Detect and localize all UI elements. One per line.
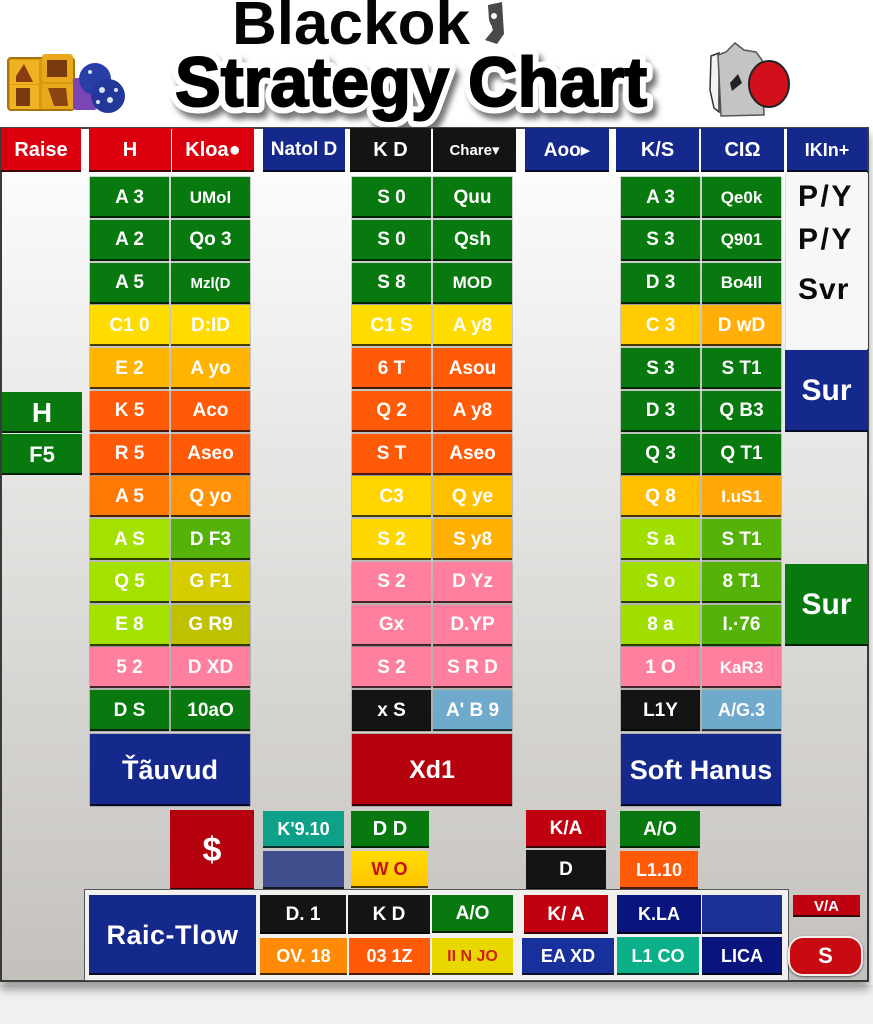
cell: D. 1 xyxy=(286,904,320,924)
tag: V/A xyxy=(793,895,860,917)
bottom panel xyxy=(84,889,789,981)
header: H: H xyxy=(123,138,137,160)
cell xyxy=(171,434,250,474)
cell xyxy=(702,434,781,474)
cell xyxy=(90,177,169,218)
cell: A 3 xyxy=(646,186,675,208)
cell xyxy=(90,305,169,346)
cell xyxy=(617,895,701,934)
cell: K'9.10: K'9.10 xyxy=(277,819,330,839)
cell xyxy=(621,434,700,474)
cell: A/G.3 xyxy=(718,700,765,720)
cell: K/A xyxy=(526,810,606,848)
cell xyxy=(90,690,169,731)
cell: Qo 3 xyxy=(189,229,232,250)
cell xyxy=(702,562,781,603)
text: P/Y: P/Y xyxy=(798,180,854,213)
cell xyxy=(702,895,782,934)
header: Moae: Kloa● xyxy=(185,138,241,160)
cell: C3 xyxy=(379,486,404,507)
cell: A/O: A/O xyxy=(643,818,677,840)
block: title xyxy=(352,734,512,806)
cell xyxy=(702,305,781,346)
header: K D xyxy=(350,128,431,172)
cell: Bo4ll xyxy=(721,273,762,292)
left labels xyxy=(2,392,82,475)
cell xyxy=(171,305,250,346)
cell xyxy=(702,647,781,688)
column: soft hands xyxy=(620,176,782,806)
cell: D S xyxy=(114,700,145,720)
cell xyxy=(433,305,512,346)
cell: x S xyxy=(377,700,406,720)
cell: A S xyxy=(114,528,145,550)
cell: A/O xyxy=(456,903,489,924)
cell xyxy=(352,305,431,346)
note panel xyxy=(785,173,868,349)
cell: L1 CO xyxy=(631,946,684,966)
cell: K/ A xyxy=(547,904,585,924)
cell xyxy=(621,348,700,389)
cell xyxy=(90,434,169,474)
cell: K'9.10 xyxy=(263,811,344,848)
cell: D XD xyxy=(188,657,233,678)
header row xyxy=(1,128,867,172)
right column xyxy=(785,173,868,646)
cell: D D: D D xyxy=(373,818,407,840)
header: CIΩ: CIΩ xyxy=(724,138,761,160)
cell: OV. 18 xyxy=(276,946,331,966)
block: $: $ xyxy=(203,830,221,868)
cell xyxy=(433,690,512,731)
cell xyxy=(352,647,431,688)
cell xyxy=(90,519,169,560)
cell xyxy=(621,647,700,688)
cell xyxy=(702,177,781,218)
cell xyxy=(90,220,169,261)
cell: S 0 xyxy=(377,186,406,208)
cell: D Yz xyxy=(452,571,493,592)
background below panel xyxy=(0,985,873,1024)
cell xyxy=(702,476,781,517)
cell: KaR3 xyxy=(720,658,763,677)
cell xyxy=(352,391,431,432)
block: Sur blue xyxy=(785,350,868,432)
cell: D D xyxy=(351,811,429,848)
cell xyxy=(621,220,700,261)
header: K D: K D xyxy=(373,138,408,160)
cell xyxy=(432,895,513,933)
cell xyxy=(621,262,700,304)
cell: C 3 xyxy=(646,315,675,336)
block: Sur green: Sur xyxy=(801,588,852,621)
cell: A y8 xyxy=(453,400,492,421)
cell xyxy=(352,519,431,560)
cell: I.·76 xyxy=(722,614,761,635)
cell xyxy=(260,938,347,975)
cell: S 3 xyxy=(646,229,675,250)
cell xyxy=(524,895,608,934)
cell: D:ID xyxy=(191,315,230,336)
cell xyxy=(432,938,513,975)
cell xyxy=(433,434,512,474)
label: F5: F5 xyxy=(29,442,55,466)
cell: S T xyxy=(377,443,406,464)
cell xyxy=(702,348,781,389)
cell: L1Y xyxy=(643,700,678,720)
cell: Q 8 xyxy=(645,486,676,507)
cell: Q T1 xyxy=(720,443,763,464)
header: Min+: IKIn+ xyxy=(805,140,849,160)
cell xyxy=(352,262,431,304)
cell xyxy=(90,348,169,389)
cell: 03 1Z xyxy=(366,946,413,966)
icon: card with red circle xyxy=(709,42,790,117)
header: Natol D xyxy=(263,128,345,172)
header: Chare xyxy=(433,128,516,172)
title line 2 shadow: Strategy Chart xyxy=(179,49,651,127)
cell xyxy=(90,262,169,304)
cell xyxy=(171,348,250,389)
cell: UMol xyxy=(190,188,231,206)
cell: L1.10: L1.10 xyxy=(636,860,682,880)
cell: Aco xyxy=(193,400,228,421)
cell: A y8 xyxy=(453,315,492,336)
cell: A 3 xyxy=(115,186,144,208)
cell xyxy=(171,476,250,517)
header: Min+ xyxy=(787,128,867,172)
cell: G F1 xyxy=(189,571,232,592)
cell xyxy=(621,476,700,517)
cell: E 8 xyxy=(115,614,144,635)
cell: D xyxy=(526,850,606,890)
block: Soft Hands xyxy=(621,734,781,806)
cell: 5 2 xyxy=(116,657,143,678)
header: Chare: Chare▾ xyxy=(449,142,500,159)
cell xyxy=(90,562,169,603)
cell: Q yo xyxy=(189,486,232,507)
button: S: S xyxy=(818,943,833,968)
cell xyxy=(352,348,431,389)
cell xyxy=(433,348,512,389)
cell xyxy=(433,647,512,688)
cell xyxy=(522,938,614,975)
cell: A 5 xyxy=(115,486,144,507)
cell xyxy=(702,937,782,975)
cell xyxy=(171,690,250,731)
block: title xyxy=(90,734,250,806)
cell: Q 3 xyxy=(645,443,676,464)
cell xyxy=(702,604,781,646)
cell xyxy=(349,938,430,975)
title line 2 halo: Strategy Chart xyxy=(175,43,647,121)
title xyxy=(170,0,661,127)
cell xyxy=(433,262,512,304)
cell: D: D xyxy=(559,859,573,880)
cell xyxy=(702,262,781,304)
cell: Q 2 xyxy=(376,400,407,421)
button: S xyxy=(788,936,863,976)
cell xyxy=(352,177,431,218)
cell: Q ye xyxy=(452,486,493,507)
cell xyxy=(90,391,169,432)
cell xyxy=(352,690,431,731)
label: H: H xyxy=(32,396,52,428)
cell: Mzl(D xyxy=(190,274,230,292)
icon: gold chest and blue chips xyxy=(7,54,125,113)
cell: A 2 xyxy=(115,229,144,250)
header: H xyxy=(89,128,171,172)
cell xyxy=(352,562,431,603)
cell: S o xyxy=(646,571,675,592)
header: K/S: K/S xyxy=(641,138,674,160)
cell xyxy=(702,220,781,261)
header: Raise xyxy=(1,128,81,172)
cell: A' B 9 xyxy=(446,700,499,720)
cell xyxy=(433,177,512,218)
cell xyxy=(621,604,700,646)
cell: L1.10 xyxy=(620,851,698,889)
block: title: Ťãuvud xyxy=(122,755,218,785)
cell: Asou xyxy=(449,358,496,378)
cell: S a xyxy=(646,528,675,550)
cell: Q901 xyxy=(721,230,762,249)
cell: A yo xyxy=(190,358,231,378)
header: Aoo: Aoo▸ xyxy=(544,140,590,160)
cell: MOD xyxy=(453,273,492,292)
cell: C1 S xyxy=(370,315,413,336)
cell xyxy=(260,895,346,934)
cell: C1 0 xyxy=(109,315,150,336)
block: $ xyxy=(170,810,254,890)
cell xyxy=(352,476,431,517)
cell xyxy=(433,519,512,560)
cell: E 2 xyxy=(115,358,144,378)
cell: A/O xyxy=(620,811,700,848)
cell: S y8 xyxy=(453,528,492,550)
cell xyxy=(617,937,699,975)
cell: A 5 xyxy=(115,272,144,293)
cell: D F3 xyxy=(190,528,231,550)
cell: Q B3 xyxy=(719,400,764,421)
cell xyxy=(433,604,512,646)
cell xyxy=(621,305,700,346)
cell xyxy=(352,434,431,474)
cell: D wD xyxy=(718,315,765,336)
cell: S 2 xyxy=(377,528,406,550)
cell xyxy=(621,391,700,432)
cell: 8 a xyxy=(647,614,674,635)
cell xyxy=(171,562,250,603)
cell xyxy=(171,604,250,646)
cell: 6 T xyxy=(378,358,405,378)
cell: W O: W O xyxy=(372,859,408,879)
cell xyxy=(171,262,250,304)
cell: Qsh xyxy=(454,229,491,250)
cell: K/A: K/A xyxy=(550,818,582,839)
cell: Gx xyxy=(379,614,404,635)
cell xyxy=(171,647,250,688)
cell: I.uS1 xyxy=(721,487,762,506)
cell: G R9 xyxy=(188,614,233,635)
cell: 8 T1 xyxy=(722,571,761,592)
header: Moae xyxy=(172,128,254,172)
cell xyxy=(352,604,431,646)
cell xyxy=(621,177,700,218)
cell xyxy=(90,647,169,688)
cell: Quu xyxy=(454,186,492,208)
cell xyxy=(621,519,700,560)
header: Raise: Raise xyxy=(14,138,68,160)
cell: R 5 xyxy=(115,443,144,464)
header: K/S xyxy=(616,128,699,172)
cell: S 3 xyxy=(646,358,675,378)
cell: Qe0k xyxy=(721,188,762,206)
cell: W O xyxy=(351,851,428,888)
column: pairs xyxy=(352,176,512,806)
label: H xyxy=(2,392,82,433)
cell: D 3 xyxy=(646,272,675,293)
cell xyxy=(433,476,512,517)
block: Sur green xyxy=(785,564,868,646)
cell: S 8 xyxy=(377,272,406,293)
cell: K 5 xyxy=(115,400,144,421)
cell xyxy=(433,220,512,261)
cell: S 2 xyxy=(377,571,406,592)
cell: D.YP xyxy=(450,614,495,635)
cell xyxy=(621,690,700,731)
cell xyxy=(90,604,169,646)
block: Raise-Flow xyxy=(89,895,256,975)
cell: S R D xyxy=(447,657,498,678)
title line 2 face: Strategy Chart xyxy=(175,43,647,121)
cell: empty blue xyxy=(263,851,344,889)
tag: V/A: V/A xyxy=(814,898,839,914)
cell: S 2 xyxy=(377,657,406,678)
column: hard hands xyxy=(90,176,250,806)
text: P/Y: P/Y xyxy=(798,223,854,256)
lower grid xyxy=(170,810,700,889)
cell: EA XD xyxy=(541,946,595,966)
cell: 1 O xyxy=(645,657,676,678)
cell: Aseo xyxy=(449,443,496,464)
header: CIΩ xyxy=(701,128,784,172)
block: Sur blue: Sur xyxy=(801,374,852,407)
cell xyxy=(352,220,431,261)
cell: 10aO xyxy=(187,700,234,720)
cell xyxy=(702,690,781,731)
cell: S T1 xyxy=(721,528,762,550)
cell: Q 5 xyxy=(114,571,145,592)
cell xyxy=(171,220,250,261)
cell: S 0 xyxy=(377,229,406,250)
cell xyxy=(433,562,512,603)
cell: II N JO xyxy=(447,948,498,964)
block: Soft Hands: Soft Hanus xyxy=(630,755,772,785)
cell xyxy=(433,391,512,432)
cell: K D xyxy=(373,904,405,924)
header: Natol D: Natol D xyxy=(271,139,337,160)
cell xyxy=(171,519,250,560)
cell: K.LA xyxy=(638,904,680,924)
cell xyxy=(90,476,169,517)
cell: D 3 xyxy=(646,400,675,421)
cell xyxy=(702,391,781,432)
cell: S T1 xyxy=(721,358,762,378)
header: Aoo xyxy=(525,128,609,172)
cell xyxy=(171,391,250,432)
cell xyxy=(171,177,250,218)
block: title: Xd1 xyxy=(409,756,455,784)
text: Svr: Svr xyxy=(798,273,849,306)
label: F5 xyxy=(2,434,82,475)
block: Raise-Flow: Raic-Tlow xyxy=(106,920,238,950)
cell xyxy=(702,519,781,560)
cell: LICA xyxy=(721,946,763,966)
title smudge xyxy=(485,2,504,44)
cell: Aseo xyxy=(187,443,234,464)
cell xyxy=(348,895,430,934)
cell xyxy=(621,562,700,603)
